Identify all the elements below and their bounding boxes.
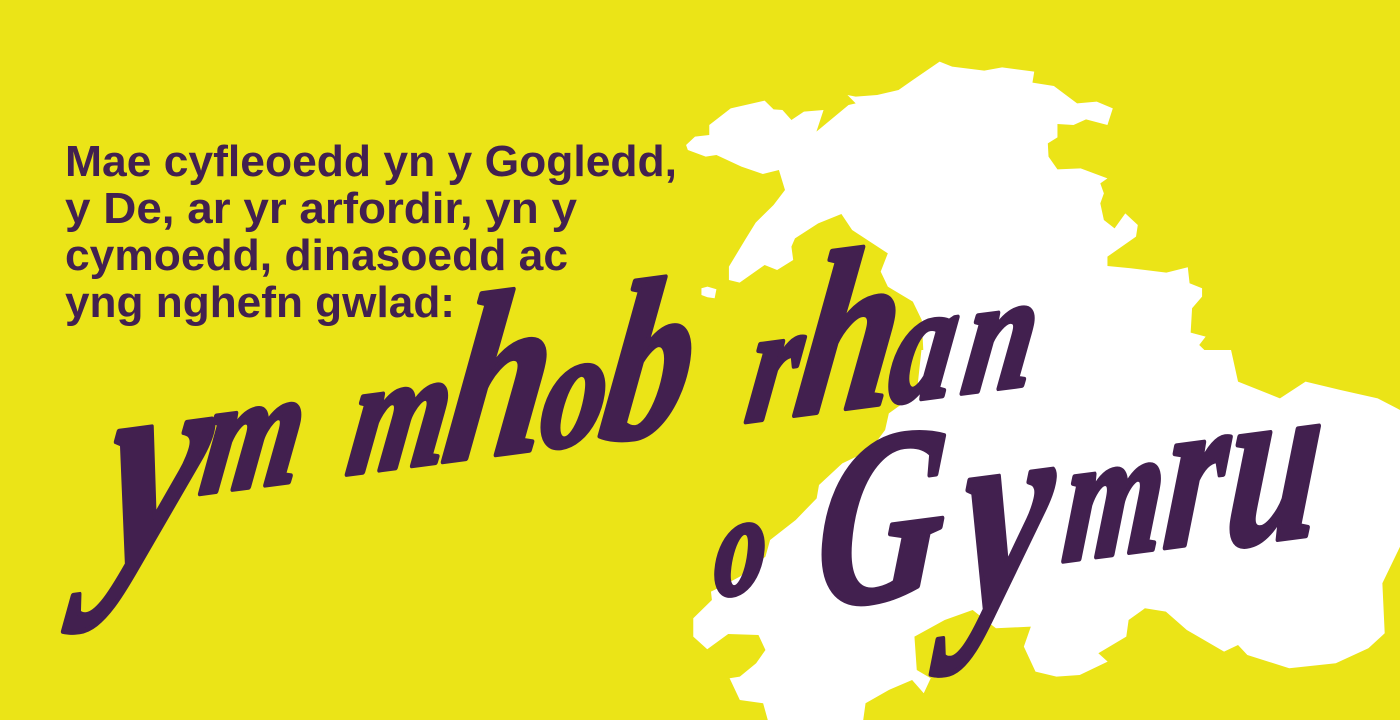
- intro text block: Mae cyfleoedd yn y Gogledd,: [65, 137, 677, 186]
- brush script heading line 2: u: [1219, 325, 1332, 598]
- intro text block: [65, 137, 677, 327]
- brush script heading line 2: y: [930, 346, 1066, 677]
- brush script heading line 2: m: [1058, 387, 1173, 602]
- intro text block: yng nghefn gwlad:: [65, 278, 455, 327]
- brush script heading line 1: y: [60, 293, 235, 635]
- brush script heading line 2: o: [710, 462, 773, 627]
- brush script heading line 2: r: [1158, 345, 1238, 596]
- intro text block: cymoedd, dinasoedd ac: [65, 231, 568, 280]
- brush script heading line 2: G: [809, 370, 956, 662]
- brush script heading line 1: mhob rhan: [339, 196, 1051, 514]
- intro text block: y De, ar yr arfordir, yn y: [65, 184, 578, 233]
- map of Wales in white: [686, 62, 1400, 720]
- brush script heading line 1: m: [192, 334, 318, 531]
